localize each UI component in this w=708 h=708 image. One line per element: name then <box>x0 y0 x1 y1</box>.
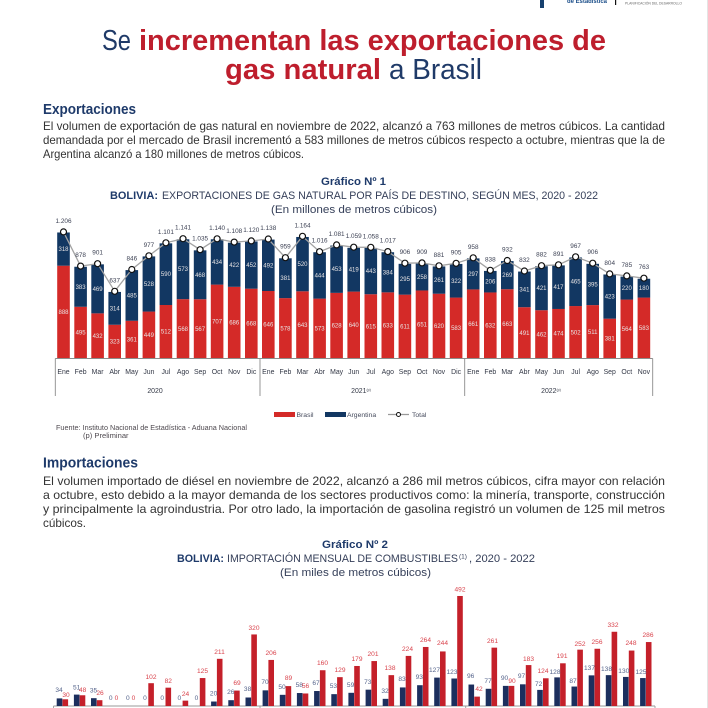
value labels: Brasil: 615 <box>366 324 376 330</box>
bars: Brasil <box>57 266 650 358</box>
text block: importaciones: a octubre, esto debido a la mayor demanda de los sectores productivos como: la minería, transporte, construcción <box>43 488 665 502</box>
value labels: diésel: 129 <box>334 667 346 674</box>
markers and total labels: 1.120 <box>243 227 260 234</box>
value labels: gasolina: 97 <box>518 673 525 680</box>
legend: Brasil <box>296 412 314 419</box>
markers and total labels: 846 <box>126 256 138 262</box>
chart 2 heading: BOLIVIA: <box>177 553 224 565</box>
axis: months and years: Mar <box>92 369 104 376</box>
value labels: diésel: 124 <box>537 668 549 675</box>
title: gas natural <box>225 54 381 86</box>
axis: months and years: Jul <box>366 369 376 376</box>
value labels: diésel: 56 <box>302 683 309 690</box>
value labels: diésel: 90 <box>508 678 516 685</box>
axis: months and years: Ene <box>57 369 70 376</box>
value labels: Argentina: 322 <box>451 279 462 285</box>
value labels: Argentina: 465 <box>571 280 581 286</box>
value labels: Argentina: 573 <box>178 267 189 273</box>
value labels: diésel: 89 <box>285 675 292 682</box>
value labels: diésel: 211 <box>214 649 225 656</box>
markers and total labels: 1.101 <box>158 229 174 236</box>
value labels: gasolina <box>55 665 647 702</box>
value labels: Brasil: 611 <box>400 325 410 331</box>
value labels: Argentina: 395 <box>588 282 598 288</box>
value labels: diésel: 183 <box>523 656 534 663</box>
value labels: Brasil: 632 <box>485 324 496 330</box>
chart 1 heading: Gráfico Nº 1 <box>321 176 387 188</box>
bars: Argentina <box>57 232 650 325</box>
title: Se <box>102 25 131 57</box>
header logos <box>540 0 682 8</box>
value labels: diésel: 160 <box>317 660 328 667</box>
value labels: Brasil: 663 <box>502 322 513 328</box>
value labels: Argentina: 297 <box>468 272 479 278</box>
markers and total labels: 1.138 <box>260 225 277 232</box>
value labels: Argentina: 422 <box>229 263 240 269</box>
title: incrementan las exportaciones de <box>139 25 606 57</box>
axis: months and years: Sep <box>604 369 616 376</box>
value labels: diésel: 191 <box>556 653 568 660</box>
value labels: Argentina: 258 <box>417 275 428 281</box>
axis: months and years: May <box>535 369 549 376</box>
axis: months and years: (p) <box>366 388 371 392</box>
value labels: Brasil: 661 <box>468 322 479 328</box>
value labels: Argentina: 434 <box>212 260 223 266</box>
value labels: diésel: 48 <box>79 687 87 694</box>
markers and total labels: 1.081 <box>329 231 345 238</box>
value labels: gasolina: 70 <box>261 679 269 686</box>
axis: months and years: Jun <box>348 369 359 376</box>
value labels: Argentina: 261 <box>434 278 445 284</box>
value labels: Brasil: 707 <box>212 320 223 326</box>
value labels: Brasil: 381 <box>605 337 615 343</box>
markers and total labels: 958 <box>468 244 479 251</box>
axis: months and years: Mar <box>501 369 514 376</box>
line: total <box>64 232 644 291</box>
value labels: diésel: 286 <box>642 632 654 639</box>
axis: months and years: Abr <box>314 369 326 376</box>
axis: months and years: Jul <box>161 369 171 376</box>
value labels: Argentina: 528 <box>144 282 155 288</box>
axis: months and years: Nov <box>433 369 446 376</box>
legend <box>274 412 427 419</box>
markers and total labels: 906 <box>400 249 411 256</box>
value labels: Argentina: 381 <box>280 276 291 282</box>
value labels: gasolina: 0 <box>195 695 199 702</box>
value labels: Brasil: 651 <box>417 322 428 328</box>
markers and total labels: 804 <box>604 260 615 267</box>
axis: months and years: Oct <box>417 369 427 376</box>
value labels: gasolina: 0 <box>143 695 147 702</box>
markers and total labels: 932 <box>502 246 513 254</box>
axis: months and years: Ago <box>382 369 394 376</box>
markers and total labels: 959 <box>280 244 291 251</box>
source note <box>56 423 247 440</box>
markers and total labels: 1.164 <box>294 222 311 229</box>
title <box>102 25 606 86</box>
value labels: Argentina: 417 <box>553 285 564 291</box>
value labels: diésel: 248 <box>625 640 637 647</box>
value labels: diésel: 42 <box>475 686 483 693</box>
value labels: gasolina: 77 <box>484 678 492 685</box>
value labels: gasolina: 73 <box>364 679 372 686</box>
axis: months and years: Feb <box>75 369 87 376</box>
value labels: Argentina: 383 <box>76 285 86 291</box>
axis: months and years: Dic <box>246 369 257 376</box>
value labels: gasolina: 34 <box>55 687 63 694</box>
value labels: gasolina: 38 <box>244 686 252 693</box>
value labels: Brasil: 628 <box>332 324 342 330</box>
value labels: diésel <box>62 586 654 702</box>
value labels: Argentina: 423 <box>605 295 615 301</box>
markers and total labels: 1.016 <box>312 238 328 245</box>
value labels: Brasil: 888 <box>58 310 69 316</box>
chart 2 heading: (En miles de metros cúbicos) <box>280 567 431 579</box>
value labels: Brasil <box>58 310 650 346</box>
value labels: Argentina: 314 <box>110 306 120 312</box>
value labels: gasolina: 67 <box>312 680 320 687</box>
text block: importaciones <box>43 474 665 530</box>
value labels: Argentina: 421 <box>536 286 547 292</box>
value labels: gasolina: 50 <box>278 684 286 691</box>
value labels: gasolina: 0 <box>126 695 130 702</box>
axis: months and years: Jul <box>571 369 580 376</box>
axis: months and years: Jun <box>553 369 564 376</box>
markers and total labels: 1.140 <box>209 225 226 232</box>
value labels: gasolina: 138 <box>601 666 612 673</box>
value labels: Argentina: 341 <box>519 287 530 293</box>
value labels: Brasil: 495 <box>76 331 86 337</box>
value labels: Brasil: 633 <box>383 323 393 329</box>
legend: Argentina <box>347 412 376 419</box>
axis: months and years: Sep <box>194 369 206 376</box>
value labels: Argentina: 590 <box>161 272 172 278</box>
value labels: Argentina: 452 <box>246 263 257 269</box>
markers and total labels: 906 <box>587 249 598 256</box>
text block: exportaciones: El volumen de exportación de gas natural en noviembre de 2022, alcanzó a 763 millones de metros cúbicos. La cantidad <box>43 119 665 133</box>
axis: months and years: Feb <box>484 369 496 376</box>
value labels: diésel: 244 <box>437 640 448 647</box>
value labels: diésel: 0 <box>115 695 119 702</box>
value labels: diésel: 69 <box>233 680 241 687</box>
text block: importaciones: cúbicos. <box>43 516 86 530</box>
value labels: gasolina: 0 <box>109 695 113 702</box>
value labels: Brasil: 583 <box>639 326 650 332</box>
value labels: gasolina: 83 <box>398 676 406 683</box>
markers and total labels: 1.141 <box>175 225 191 232</box>
value labels: diésel: 492 <box>454 586 466 594</box>
value labels: gasolina: 87 <box>569 678 577 685</box>
markers and total labels: 832 <box>519 257 530 264</box>
bar chart: exportaciones por país <box>55 218 653 396</box>
value labels: gasolina: 59 <box>347 682 355 689</box>
value labels: gasolina: 72 <box>535 681 543 688</box>
chart 1 heading: (En millones de metros cúbicos) <box>271 204 437 216</box>
value labels: Argentina: 492 <box>263 263 274 269</box>
markers and total labels: 977 <box>144 242 155 249</box>
value labels: diésel: 320 <box>248 625 260 632</box>
value labels: Brasil: 583 <box>451 326 462 332</box>
chart 2 heading <box>177 539 535 579</box>
value labels: gasolina: 53 <box>330 683 337 690</box>
bars: diésel <box>62 596 652 706</box>
value labels: diésel: 252 <box>574 641 586 648</box>
text block: importaciones: El volumen importado de diésel en noviembre de 2022, alcanzó a 286 mil metros cúbicos, cifra mayor con relación <box>43 474 665 488</box>
markers and total labels: 637 <box>109 277 120 284</box>
value labels: Brasil: 512 <box>161 330 172 336</box>
value labels: diésel: 82 <box>165 678 172 685</box>
value labels: diésel: 30 <box>62 692 70 699</box>
value labels: diésel: 224 <box>402 646 413 653</box>
value labels: Argentina: 269 <box>502 273 513 279</box>
value labels: Brasil: 578 <box>280 326 291 332</box>
axis <box>54 706 655 708</box>
value labels: gasolina: 96 <box>467 673 475 680</box>
value labels: Brasil: 686 <box>229 321 240 327</box>
chart 2 heading: Gráfico Nº 2 <box>322 539 388 551</box>
value labels: diésel: 26 <box>96 690 104 697</box>
markers and total labels: 838 <box>485 256 496 263</box>
markers and total labels: 905 <box>451 249 462 256</box>
heading: Exportaciones: Exportaciones <box>43 101 136 118</box>
value labels: Argentina: 180 <box>639 286 650 292</box>
heading: Importaciones: Importaciones <box>43 454 138 472</box>
value labels: Argentina: 443 <box>366 269 376 275</box>
markers and total labels: 891 <box>553 251 564 258</box>
value labels: Brasil: 491 <box>519 331 530 337</box>
markers and total labels: 1.206 <box>56 218 72 225</box>
value labels: Brasil: 432 <box>93 334 103 340</box>
text block: exportaciones: demandada por el mercado de Brasil incrementó a 583 millones de metros cúbicos respecto a octubre, mientras que la de <box>43 133 665 147</box>
value labels: Argentina: 453 <box>332 267 342 273</box>
value labels: Brasil: 511 <box>588 330 598 336</box>
markers and total labels: 763 <box>639 264 650 271</box>
value labels: diésel: 24 <box>182 691 189 698</box>
markers and total labels: 967 <box>570 243 581 250</box>
value labels: Argentina: 444 <box>315 273 325 279</box>
value labels: Argentina: 520 <box>297 262 308 268</box>
value labels: diésel: 206 <box>265 650 277 657</box>
value labels: diésel: 125 <box>197 668 208 675</box>
axis: months and years: Abr <box>109 369 121 376</box>
value labels: diésel: 102 <box>145 674 157 681</box>
value labels: Argentina: 206 <box>485 280 496 286</box>
value labels: diésel: 264 <box>420 637 431 644</box>
markers and total labels: 785 <box>621 262 633 269</box>
value labels: Argentina: 220 <box>622 286 632 292</box>
axis: months and years: May <box>125 369 139 376</box>
markers and total labels: 1.059 <box>346 233 362 240</box>
text block: exportaciones: Argentina alcanzó a 180 millones de metros cúbicos. <box>43 147 304 161</box>
value labels: diésel: 332 <box>607 622 619 629</box>
markers and total labels: 881 <box>434 252 445 259</box>
value labels: gasolina: 35 <box>90 688 97 694</box>
axis: months and years: Ago <box>587 369 599 376</box>
value labels: Brasil: 640 <box>349 323 359 329</box>
value labels: Brasil: 462 <box>536 332 547 338</box>
chart 1 heading <box>110 176 598 216</box>
source note: (p) Preliminar <box>83 431 129 440</box>
markers and total labels: 878 <box>75 252 86 259</box>
value labels: Brasil: 474 <box>553 332 564 338</box>
axis: months and years <box>55 358 653 396</box>
value labels: diésel: 179 <box>351 656 363 663</box>
markers and total labels: 882 <box>536 252 547 259</box>
axis: months and years: Ene <box>467 369 479 376</box>
markers and total labels: 1.017 <box>380 238 396 245</box>
value labels: gasolina: 128 <box>549 669 561 676</box>
value labels: gasolina: 130 <box>618 668 630 675</box>
value labels: gasolina: 90 <box>501 675 508 682</box>
value labels: gasolina: 51 <box>73 684 81 692</box>
value labels: gasolina: 26 <box>227 689 235 696</box>
value labels: Argentina: 468 <box>195 273 206 279</box>
axis: months and years: Mar <box>297 369 309 376</box>
axis: months and years: Sep <box>399 369 411 376</box>
value labels: gasolina: 127 <box>429 667 440 674</box>
axis: months and years: Oct <box>212 369 223 376</box>
text block: exportaciones <box>43 119 665 161</box>
value labels: Argentina: 384 <box>383 270 393 276</box>
legend: Total <box>412 412 427 419</box>
value labels: Brasil: 643 <box>297 323 308 329</box>
axis: months and years: Nov <box>638 369 651 376</box>
chart 2 heading: IMPORTACIÓN MENSUAL DE COMBUSTIBLES <box>227 552 458 565</box>
axis: months and years: Dic <box>451 369 462 376</box>
value labels: gasolina: 125 <box>635 669 647 676</box>
value labels: Argentina: 419 <box>349 268 359 274</box>
axis: months and years: Ago <box>177 369 189 376</box>
value labels: Argentina: 469 <box>93 287 103 293</box>
value labels: gasolina: 93 <box>416 674 423 681</box>
value labels: Brasil: 323 <box>110 340 120 346</box>
value labels: gasolina: 123 <box>446 669 458 676</box>
markers and total labels: 1.058 <box>363 233 379 240</box>
axis: months and years: Oct <box>621 369 632 376</box>
value labels: Argentina <box>58 247 650 312</box>
value labels: gasolina: 0 <box>160 695 164 702</box>
markers and total labels: 1.035 <box>192 236 209 243</box>
value labels: Brasil: 668 <box>246 322 257 328</box>
markers and total labels <box>56 218 650 294</box>
value labels: Argentina: 485 <box>127 293 137 299</box>
value labels: gasolina: 20 <box>210 690 218 698</box>
header logos: PLANIFICACIÓN DEL DESARROLLO <box>625 1 682 6</box>
markers and total labels: 909 <box>417 249 428 256</box>
value labels: diésel: 138 <box>384 665 396 672</box>
chart 1 heading: BOLIVIA: <box>110 190 158 202</box>
value labels: gasolina: 0 <box>177 695 181 702</box>
axis: months and years: 2022 <box>541 388 556 395</box>
bar chart: importación de combustibles <box>54 586 655 708</box>
axis: months and years: May <box>330 369 344 376</box>
source note: Fuente: Instituto Nacional de Estadística - Aduana Nacional <box>56 423 247 432</box>
axis: months and years: 2021 <box>351 388 366 395</box>
chart 2 heading: (1) <box>459 554 467 560</box>
value labels: Brasil: 564 <box>622 327 632 333</box>
markers and total labels: 901 <box>92 250 103 257</box>
value labels: Brasil: 502 <box>571 330 581 336</box>
value labels: diésel: 256 <box>591 639 603 646</box>
axis: months and years: (p) <box>556 388 561 392</box>
title: a Brasil <box>389 54 482 86</box>
value labels: gasolina: 58 <box>296 682 303 689</box>
value labels: Argentina: 318 <box>58 247 69 253</box>
value labels: Brasil: 646 <box>263 323 274 329</box>
value labels: Brasil: 620 <box>434 324 445 330</box>
value labels: diésel: 0 <box>132 695 136 702</box>
value labels: gasolina: 32 <box>381 688 389 695</box>
value labels: Brasil: 361 <box>127 338 137 344</box>
bars: gasolina <box>57 675 646 706</box>
chart 2 heading: , 2020 - 2022 <box>469 553 535 565</box>
value labels: Brasil: 449 <box>144 333 155 339</box>
value labels: gasolina: 137 <box>584 665 595 672</box>
markers and total labels: 1.108 <box>226 228 243 235</box>
value labels: Argentina: 295 <box>400 277 411 283</box>
axis: months and years: Jun <box>143 369 155 376</box>
text block: importaciones: y principalmente la agroindustria. Por otro lado, la importación de gasolina registró un volumen de 125 mil metros <box>43 502 665 516</box>
value labels: Brasil: 573 <box>315 327 325 333</box>
chart 1 heading: EXPORTACIONES DE GAS NATURAL POR PAÍS DE DESTINO, SEGÚN MES, 2020 - 2022 <box>162 189 598 202</box>
value labels: Brasil: 567 <box>195 327 206 333</box>
value labels: diésel: 261 <box>487 638 498 645</box>
axis: months and years: Ene <box>262 369 275 376</box>
axis: months and years: 2020 <box>147 388 163 395</box>
axis: months and years: Feb <box>279 369 292 376</box>
value labels: Brasil: 568 <box>178 327 189 333</box>
axis: months and years: Abr <box>519 369 530 376</box>
value labels: diésel: 201 <box>367 651 379 658</box>
axis: months and years: Nov <box>228 369 241 376</box>
